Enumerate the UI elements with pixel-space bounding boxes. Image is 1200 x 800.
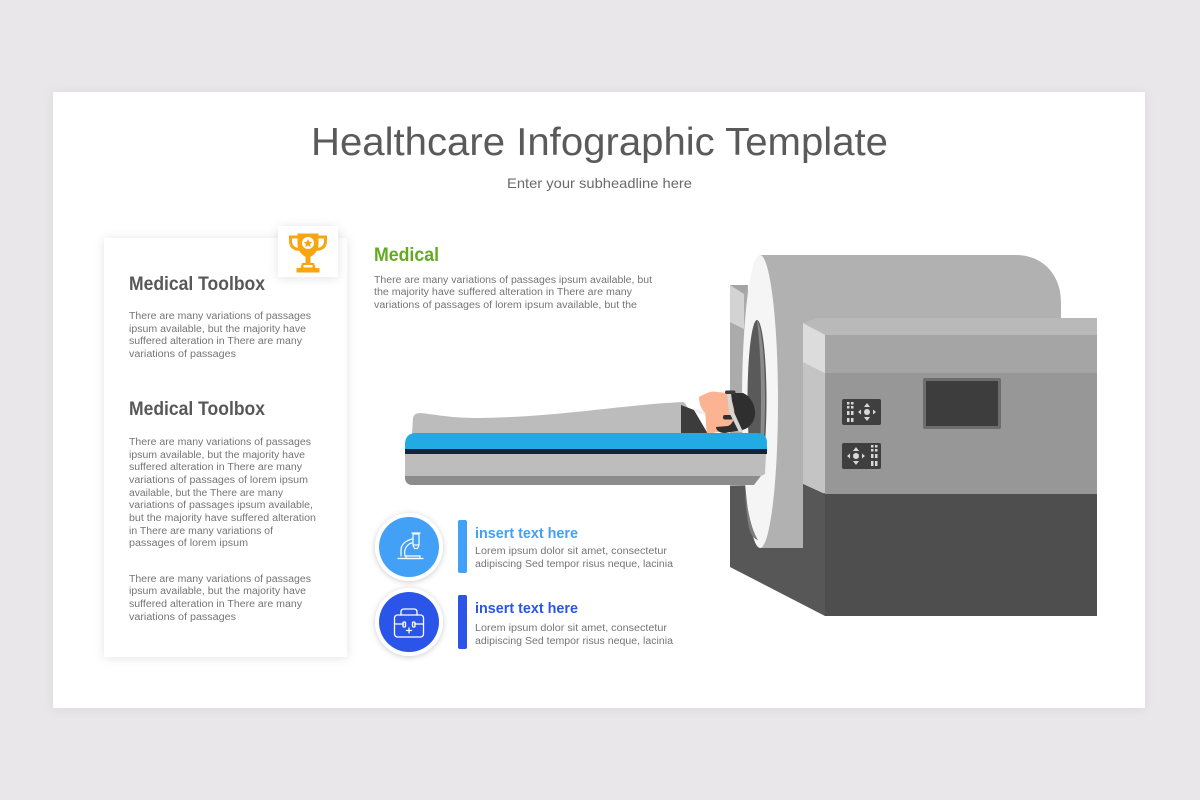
background slide card xyxy=(53,92,1145,708)
text block: third toolbox: ipsum available, but the majority have xyxy=(129,586,306,597)
callout text: Lorem ipsum dolor sit amet, consectetur xyxy=(475,623,668,634)
text block: third toolbox: suffered alteration in There are many xyxy=(129,599,302,610)
text block: medical xyxy=(374,275,652,311)
scanner base xyxy=(730,484,825,616)
patient xyxy=(412,390,755,434)
panel: medical toolbox xyxy=(104,238,347,657)
callout text: Lorem ipsum dolor sit amet, consectetur xyxy=(475,546,668,557)
text block: medical: the majority have suffered alteration in There are many xyxy=(374,287,632,298)
callout heading: insert text here xyxy=(475,526,578,542)
text block: medical: There are many variations of passages ipsum available, but xyxy=(374,275,652,286)
scanner gantry body xyxy=(760,255,1061,548)
heading: medical: Medical xyxy=(374,245,439,266)
text block: second toolbox xyxy=(129,437,316,549)
patient table xyxy=(405,433,767,485)
callout text xyxy=(475,623,673,647)
text block: third toolbox xyxy=(129,574,311,623)
scanner rear block xyxy=(730,285,748,486)
text block: third toolbox: There are many variations of passages xyxy=(129,574,311,585)
icon: medical case xyxy=(375,588,443,656)
text block: third toolbox: variations of passages xyxy=(129,612,236,623)
text block: second toolbox: ipsum available, but the majority have xyxy=(129,450,305,461)
text block: second toolbox: variations of passages of lorem ipsum xyxy=(129,475,308,486)
subtitle: Enter your subheadline here xyxy=(507,175,692,191)
scanner console block xyxy=(803,318,1097,616)
heading: first toolbox: Medical Toolbox xyxy=(129,274,265,295)
callout text: adipiscing Sed tempor risus neque, lacinia xyxy=(475,636,673,647)
scanner control pad bottom xyxy=(842,443,881,469)
text block: second toolbox: passages of lorem ipsum xyxy=(129,538,248,549)
callout text xyxy=(475,546,673,570)
text block: second toolbox: suffered alteration in There are many xyxy=(129,462,302,473)
scanner screen xyxy=(923,378,1001,429)
accent bar xyxy=(458,595,467,649)
callout heading: insert text here xyxy=(475,601,578,617)
text block: second toolbox: available, but the There are many xyxy=(129,488,283,499)
text block: second toolbox: There are many variations of passages xyxy=(129,437,311,448)
text block: second toolbox: variations of passages ipsum available, xyxy=(129,500,313,511)
text block: first toolbox: There are many variations of passages xyxy=(129,311,311,322)
icon: trophy xyxy=(278,226,338,277)
text block: first toolbox: variations of passages xyxy=(129,349,236,360)
text block: first toolbox: ipsum available, but the majority have xyxy=(129,324,306,335)
text block: first toolbox: suffered alteration in There are many xyxy=(129,336,302,347)
title: Healthcare Infographic Template xyxy=(311,121,888,164)
accent bar xyxy=(458,520,467,573)
callout: insert text two xyxy=(375,588,673,656)
text block: medical: variations of passages of lorem ipsum available, but the xyxy=(374,300,637,311)
MRI scanner xyxy=(405,255,1097,616)
scanner control pad top xyxy=(842,399,881,425)
scanner ring xyxy=(742,255,778,548)
icon: microscope xyxy=(375,513,443,581)
callout text: adipiscing Sed tempor risus neque, lacinia xyxy=(475,559,673,570)
callout: insert text one xyxy=(375,513,673,581)
text block: first toolbox xyxy=(129,311,311,360)
text block: second toolbox: in There are many variations of xyxy=(129,526,273,537)
text block: second toolbox: but the majority have suffered alteration xyxy=(129,513,316,524)
heading: second toolbox: Medical Toolbox xyxy=(129,399,265,420)
